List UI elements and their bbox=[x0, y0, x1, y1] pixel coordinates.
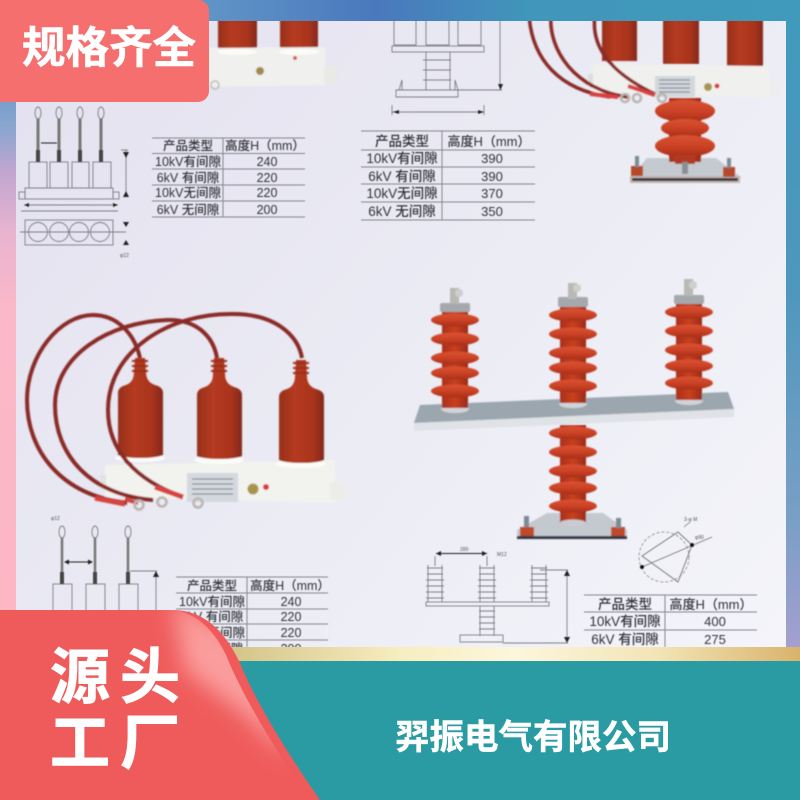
spec table 1: 6kV 无间隙 bbox=[157, 203, 220, 217]
spec table 1: 6kV 有间隙 bbox=[157, 171, 220, 185]
spec table 3: 220 bbox=[281, 626, 301, 640]
spec table 1: 220 bbox=[257, 171, 277, 185]
top-left badge: 规格齐全 bbox=[22, 25, 196, 73]
spec table 4: 10kV有间隙 bbox=[589, 614, 661, 629]
spec table 1: 10kV有间隙 bbox=[155, 155, 221, 169]
company name: 羿振电气有限公司 bbox=[395, 719, 671, 757]
product: top-right surge protector on insulator bbox=[529, 15, 781, 183]
spec table 3 bbox=[176, 576, 328, 647]
image panel bbox=[16, 15, 786, 656]
spec table 4: 6kV 有间隙 bbox=[591, 632, 659, 647]
spec table 2: 10kV无间隙 bbox=[366, 186, 438, 201]
spec table 3: 高度H（mm） bbox=[250, 578, 330, 593]
spec table 4: 400 bbox=[704, 614, 726, 629]
steel bar bbox=[414, 392, 734, 431]
badge text: source factory: 头 bbox=[120, 644, 180, 711]
schematic: triangular base plan bbox=[639, 517, 712, 582]
spec table 2: 10kV有间隙 bbox=[366, 151, 438, 166]
spec table 2: 高度H（mm） bbox=[447, 134, 531, 149]
spec table 1: 产品类型 bbox=[163, 139, 213, 153]
spec table 4: 275 bbox=[704, 632, 726, 647]
product: top-left surge protector bbox=[205, 15, 337, 89]
cylinder 1 bbox=[118, 358, 163, 458]
schematic: bottom-left three-pole: φ12 bbox=[51, 516, 60, 522]
spec table 1: 10kV无间隙 bbox=[155, 186, 221, 200]
gold divider stripe bbox=[0, 647, 800, 661]
insulator centre bbox=[549, 283, 597, 408]
spec table 1: 220 bbox=[257, 186, 277, 200]
insulator right bbox=[665, 279, 713, 405]
spec table 1: 240 bbox=[257, 155, 277, 169]
spec table 4 bbox=[584, 595, 757, 647]
cylinder 3 bbox=[279, 360, 324, 463]
spec table 2 bbox=[361, 131, 535, 220]
spec table 2: 产品类型 bbox=[375, 134, 429, 149]
schematic: bottom-centre three insulators: 289 bbox=[460, 547, 469, 553]
spec table 1: 高度H（mm） bbox=[225, 138, 305, 153]
schematic: bottom-left three-pole bbox=[50, 515, 160, 610]
badge text: source factory: 工 bbox=[50, 710, 110, 777]
tab gloss bbox=[164, 610, 280, 756]
insulator and mounting plate bbox=[630, 98, 742, 183]
white base bbox=[105, 460, 335, 503]
schematic: bottom-centre three insulators: M12 bbox=[497, 552, 507, 558]
spec table 3: 6kV 无间隙 bbox=[181, 642, 244, 656]
lower insulator bbox=[517, 425, 627, 539]
spec table 3: 240 bbox=[281, 595, 301, 609]
schematic: top centre bbox=[392, 15, 503, 115]
product: three-phase surge protector with cables bbox=[27, 314, 345, 510]
spec table 3: 产品类型 bbox=[187, 579, 237, 593]
schematic: bottom-centre three insulators bbox=[426, 547, 570, 643]
spec table 2: 370 bbox=[481, 186, 503, 201]
spec table 2: 390 bbox=[481, 169, 503, 184]
product: insulators on steel bar bbox=[414, 279, 734, 539]
spec table 3: 10kV有间隙 bbox=[179, 595, 245, 609]
badge text: source factory: 厂 bbox=[120, 710, 180, 777]
badge text: source factory bbox=[50, 644, 180, 777]
spec table 3: 200 bbox=[281, 642, 301, 656]
spec table 3: 6kV 有间隙 bbox=[181, 610, 244, 624]
spec table 1: 200 bbox=[257, 203, 277, 217]
red corner tab bbox=[0, 600, 320, 800]
spec table 2: 6kV 无间隙 bbox=[368, 204, 436, 219]
spec table 2: 350 bbox=[481, 204, 503, 219]
badge text: source factory: 源 bbox=[50, 644, 110, 711]
spec table 2: 390 bbox=[481, 151, 503, 166]
schematic: triangular base plan: φ90 bbox=[695, 535, 704, 541]
teal footer band bbox=[0, 661, 800, 800]
schematic: four-pole front and plan view bbox=[19, 107, 129, 259]
spec table 2: 6kV 有间隙 bbox=[368, 169, 436, 184]
spec table 1 bbox=[152, 138, 305, 217]
schematic: four-pole front and plan view: φ12 bbox=[120, 253, 129, 259]
spec table 3: 10kV无间隙 bbox=[179, 626, 245, 640]
schematic: triangular base plan: 3-φ M bbox=[684, 517, 697, 523]
top-left badge bbox=[0, 0, 209, 102]
spec table 4: 高度H（mm） bbox=[669, 597, 753, 612]
cables bbox=[27, 315, 140, 503]
spec table 4: 产品类型 bbox=[598, 597, 652, 612]
insulator left bbox=[431, 288, 479, 413]
spec table 3: 220 bbox=[281, 610, 301, 624]
cylinder 2 bbox=[197, 358, 242, 459]
